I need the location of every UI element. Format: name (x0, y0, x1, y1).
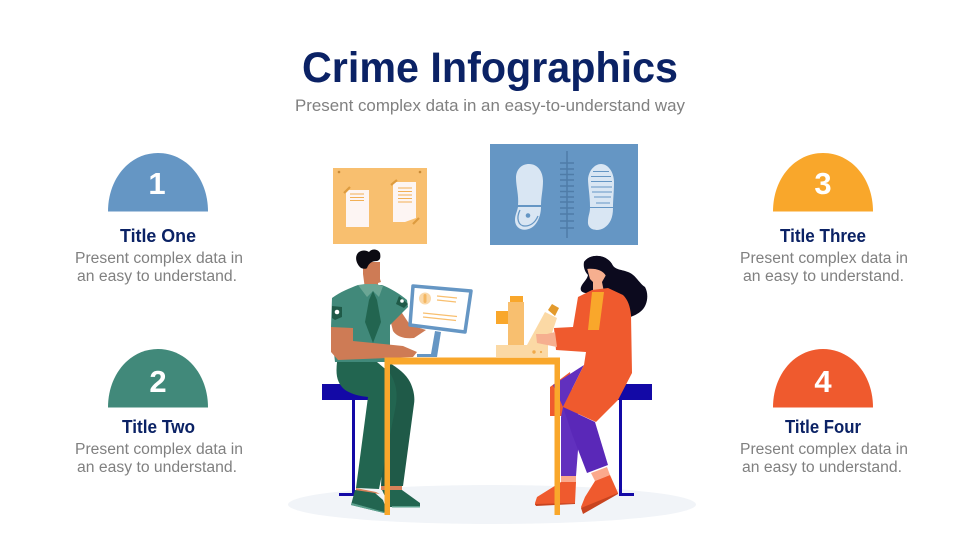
description four (740, 441, 908, 476)
right footprint (588, 164, 614, 207)
shoes (535, 482, 576, 505)
heading three: Title Three (780, 226, 866, 246)
left stool (322, 384, 369, 496)
footprint evidence panel (490, 144, 638, 245)
collar (358, 284, 383, 297)
ankles (356, 486, 402, 494)
description three: an easy to understand. (743, 268, 904, 285)
front leg (337, 362, 397, 489)
badge one (108, 153, 208, 212)
heading four: Title Four (785, 417, 861, 437)
shirt (331, 285, 408, 362)
description one: an easy to understand. (77, 268, 237, 285)
heading two: Title Two (122, 417, 195, 437)
purple trousers (553, 365, 584, 407)
description three (740, 250, 908, 285)
left footprint (516, 164, 543, 205)
item one (75, 153, 243, 285)
ankles (561, 467, 610, 483)
hair (356, 249, 380, 269)
long hair (581, 256, 647, 317)
woman (535, 256, 647, 514)
tie (365, 291, 381, 343)
description two: Present complex data in (75, 441, 243, 458)
badge four (773, 349, 873, 408)
near arm (331, 327, 417, 360)
number four: 4 (814, 364, 832, 399)
item two (75, 349, 243, 476)
right stool (618, 384, 652, 496)
number three: 3 (814, 166, 832, 201)
notice board (333, 168, 427, 244)
item three (740, 153, 908, 285)
illustration: investigators at desk (288, 144, 696, 524)
description two (75, 441, 243, 476)
badge three (773, 153, 873, 212)
number one: 1 (148, 166, 166, 201)
coat (554, 288, 632, 422)
table (384, 358, 560, 515)
shoulder badges (332, 306, 342, 320)
heading one: Title One (120, 226, 196, 246)
neck and face (363, 262, 381, 289)
item four (740, 349, 908, 476)
far arm (391, 310, 426, 338)
shoes (382, 490, 420, 507)
description one (75, 250, 243, 285)
back coat (550, 372, 575, 416)
inner top (588, 292, 604, 330)
subtitle: Present complex data in an easy-to-understand way (295, 97, 686, 115)
description two: an easy to understand. (77, 459, 237, 476)
ruler (560, 151, 574, 238)
description four: Present complex data in (740, 441, 908, 458)
microscope (496, 296, 559, 357)
badge two (108, 349, 208, 408)
computer monitor (410, 286, 471, 357)
description four: an easy to understand. (742, 459, 902, 476)
man (331, 249, 426, 514)
description three: Present complex data in (740, 250, 908, 267)
floor shadow (288, 485, 696, 524)
description one: Present complex data in (75, 250, 243, 267)
hand (536, 332, 557, 347)
face and neck (587, 268, 606, 296)
number two: 2 (149, 364, 167, 399)
back leg (381, 362, 414, 486)
title: Crime Infographics (302, 44, 678, 92)
